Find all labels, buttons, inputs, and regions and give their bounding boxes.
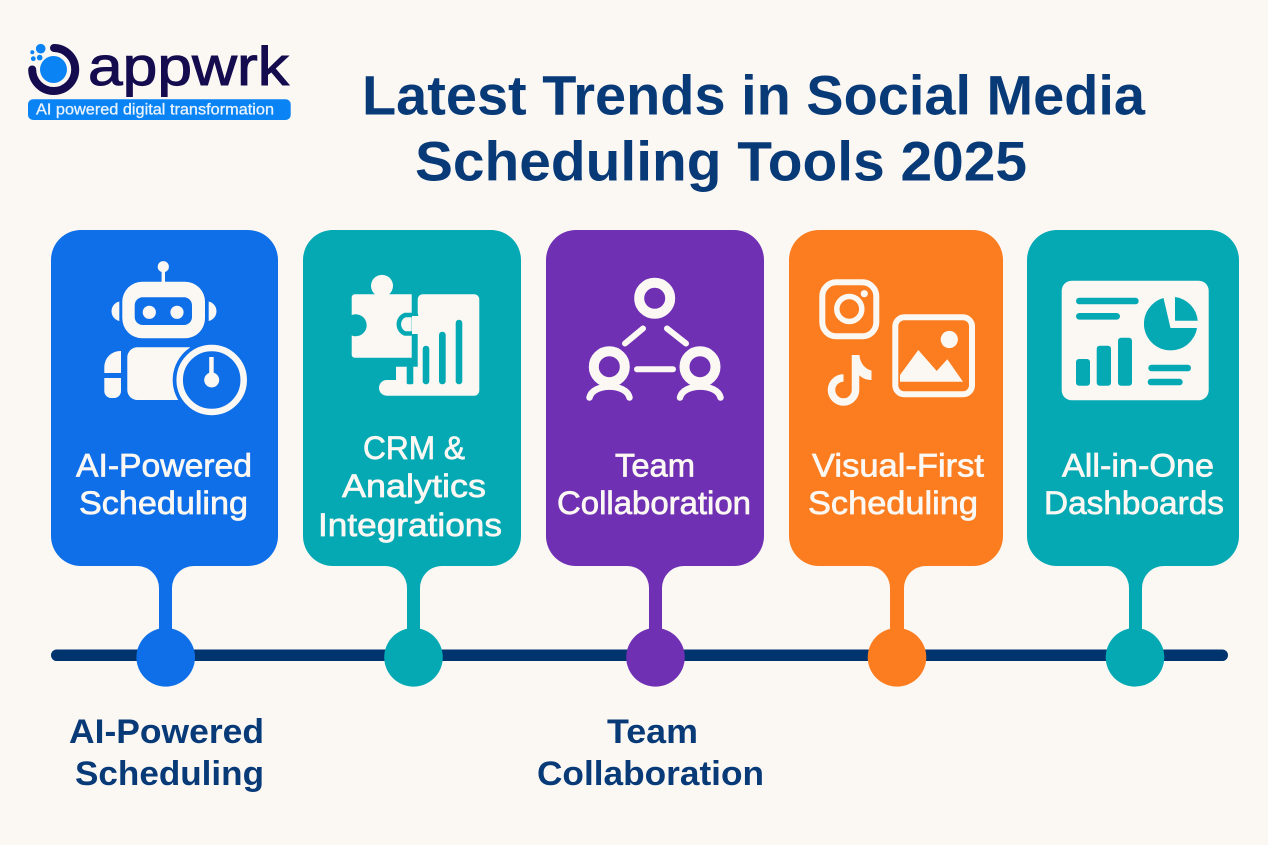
timeline node [868, 628, 926, 687]
icon: team network [590, 283, 720, 398]
timeline bar [51, 650, 1228, 661]
icon: robot with clock [104, 261, 251, 419]
card [789, 230, 1003, 640]
card [546, 230, 764, 640]
card label: All-in-One [1062, 448, 1214, 484]
card label [808, 448, 984, 521]
card label: Scheduling [808, 485, 978, 521]
title: Scheduling Tools 2025 [415, 130, 1027, 192]
timeline label: Team Collaboration: Collaboration [537, 755, 764, 793]
card label: Visual-First [812, 448, 984, 484]
logo tagline: AI powered digital transformation [36, 102, 274, 118]
panel: CRM & Analytics Integrations [303, 230, 521, 687]
card label: Scheduling [79, 485, 248, 521]
card label [557, 448, 751, 521]
timeline node [136, 628, 195, 687]
card label: Integrations [318, 507, 502, 543]
icon: social media and image [822, 282, 972, 402]
icon: dashboard [1062, 281, 1209, 400]
card label: AI-Powered [76, 448, 252, 484]
card [51, 230, 278, 640]
card label: Analytics [342, 468, 486, 504]
timeline node [1106, 628, 1164, 687]
logo wordmark: appwrk [88, 35, 290, 97]
card label: CRM & [363, 430, 465, 466]
title [362, 64, 1146, 192]
card label: Dashboards [1044, 485, 1224, 521]
timeline label: AI-Powered Scheduling [69, 713, 264, 793]
panel: Team Collaboration [546, 230, 764, 687]
card [1027, 230, 1239, 640]
timeline label: Team Collaboration [537, 713, 764, 793]
image glyph [895, 317, 972, 394]
instagram glyph [822, 282, 876, 336]
timeline label: AI-Powered Scheduling: AI-Powered [69, 713, 264, 751]
timeline node [626, 628, 685, 687]
card label [1044, 448, 1224, 521]
tiktok glyph [832, 355, 872, 402]
timeline node [384, 628, 443, 687]
logo: appwrk [28, 35, 291, 120]
timeline label: AI-Powered Scheduling: Scheduling [75, 755, 264, 793]
card label [76, 448, 252, 521]
panel: Visual-First Scheduling [789, 230, 1003, 687]
logo mark [30, 44, 75, 91]
panel: All-in-One Dashboards [1027, 230, 1239, 687]
card label: Collaboration [557, 485, 751, 521]
card label: Team [615, 448, 695, 484]
panel: AI-Powered Scheduling [51, 230, 278, 687]
card label [318, 430, 502, 543]
timeline label: Team Collaboration: Team [607, 713, 698, 751]
icon: puzzle and chart [352, 275, 479, 396]
title: Latest Trends in Social Media [362, 64, 1146, 126]
card [303, 230, 521, 640]
